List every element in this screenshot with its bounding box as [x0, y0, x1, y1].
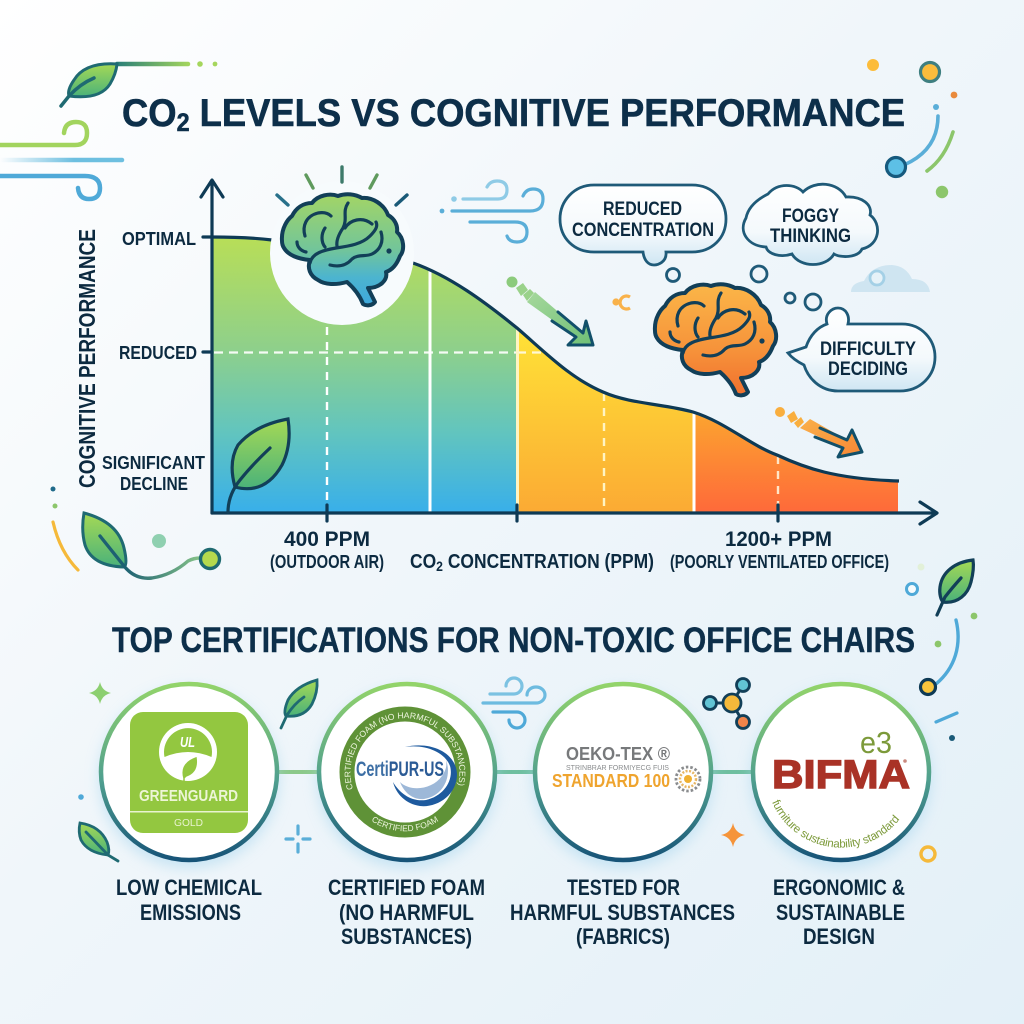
panel: BIFMA badge: [750, 682, 932, 862]
icon: stressed orange brain: [655, 284, 776, 395]
logo: CertiPUR-US seal: CERTIFIED FOAM (NO HARMFUL SUBSTANCES): [344, 712, 466, 790]
logo: BIFMA e3: furniture sustainability standard: [772, 800, 900, 848]
decoration: bottom-left leaf and node: [50, 486, 220, 578]
caption: tested for harmful substances: HARMFUL SUBSTANCES: [510, 900, 735, 925]
logo: CertiPUR-US seal: [340, 706, 470, 838]
logo: BIFMA e3: [772, 725, 910, 848]
logo: GREENGUARD Gold: [130, 712, 248, 833]
y axis title: COGNITIVE PERFORMANCE: [74, 229, 100, 488]
caption: ergonomic and sustainable design: ERGONOMIC &: [773, 875, 905, 900]
caption: certified foam: [328, 875, 485, 949]
chart area: orange zone: [693, 412, 898, 513]
x axis labels: 1200+ PPM: [725, 528, 832, 551]
thought cloud: foggy thinking: THINKING: [770, 226, 851, 247]
speech bubble: difficulty deciding: DECIDING: [828, 359, 908, 380]
title: 2: [177, 109, 190, 137]
caption: ergonomic and sustainable design: SUSTAINABLE: [776, 900, 905, 925]
decoration: top-right dots and arcs: [867, 59, 957, 198]
y axis labels: REDUCED: [119, 342, 197, 363]
arrow: orange trend: [775, 407, 862, 457]
line chart: CO2 vs performance: [201, 180, 937, 524]
y axis labels: SIGNIFICANT: [102, 452, 206, 473]
logo: BIFMA e3: e3: [860, 725, 892, 760]
logo: OEKO-TEX Standard 100: STRINBRAR FORMIYECG FUIS: [566, 765, 669, 772]
y axis labels: DECLINE: [120, 473, 188, 494]
x axis labels: (OUTDOOR AIR): [270, 552, 384, 572]
performance curve: [212, 237, 899, 481]
caption: tested for harmful substances: (FABRICS): [576, 924, 670, 949]
white spotlight behind green brain: [270, 181, 414, 325]
speech bubble: reduced concentration: [560, 185, 726, 265]
x axis labels: [270, 528, 889, 574]
icon: healthy green brain: [277, 167, 407, 305]
chart area: green to blue zone: [212, 237, 517, 513]
caption: ergonomic and sustainable design: DESIGN: [803, 924, 875, 949]
speech bubble: difficulty deciding: [788, 308, 935, 391]
speech bubble: reduced concentration: CONCENTRATION: [572, 220, 714, 241]
panel: GREENGUARD badge: [101, 684, 277, 860]
decoration: sparkles, leaves and molecule around badges: [78, 678, 935, 861]
decoration: right leaf, node and dashes: [906, 560, 977, 741]
x axis labels: (POORLY VENTILATED OFFICE): [670, 552, 889, 572]
caption: certified foam: CERTIFIED FOAM: [328, 875, 485, 900]
speech bubble: difficulty deciding: DIFFICULTY: [820, 339, 916, 360]
logo: OEKO-TEX Standard 100: OEKO-TEX ®: [566, 744, 670, 764]
caption: tested for harmful substances: TESTED FOR: [567, 875, 680, 900]
x axis labels: 2: [436, 558, 443, 574]
caption: low chemical emissions: LOW CHEMICAL: [116, 875, 262, 900]
logo: GREENGUARD Gold: GREENGUARD: [139, 788, 238, 805]
decoration: small orange swirl: [614, 296, 630, 309]
title: LEVELS VS COGNITIVE PERFORMANCE: [190, 92, 905, 135]
logo: CertiPUR-US seal: CERTIFIED FOAM: [372, 816, 438, 832]
decoration: small cloud: [851, 265, 930, 292]
logo: BIFMA e3: BIFMA: [772, 753, 910, 797]
caption: certified foam: (NO HARMFUL: [339, 900, 474, 925]
logo: GREENGUARD Gold: UL: [180, 734, 195, 751]
icon: leaf on chart: [228, 419, 289, 512]
logo: GREENGUARD Gold: GOLD: [174, 817, 203, 829]
y axis labels: [102, 228, 206, 494]
speech bubble: reduced concentration: REDUCED: [603, 199, 682, 220]
caption: low chemical emissions: EMISSIONS: [140, 900, 241, 925]
y axis labels: OPTIMAL: [122, 228, 196, 249]
caption: certified foam: SUBSTANCES): [341, 924, 472, 949]
logo: CertiPUR-US seal: CertiPUR-US: [356, 757, 444, 781]
logo: OEKO-TEX Standard 100: [552, 744, 700, 791]
logo: OEKO-TEX Standard 100: STANDARD 100: [552, 771, 670, 791]
chart area: yellow zone: [517, 328, 693, 513]
thought bubbles: [666, 266, 821, 310]
panel: OEKO-TEX badge: [535, 684, 711, 860]
thought cloud: foggy thinking: FOGGY: [782, 206, 839, 227]
decoration: top-left leaf and wind: [0, 61, 217, 199]
caption: tested for harmful substances: [510, 875, 735, 949]
caption: low chemical emissions: [116, 875, 262, 925]
arrow: green trend: [506, 276, 593, 345]
panel: badge shadows: [99, 688, 931, 868]
panel: CertiPUR-US badge: [316, 682, 498, 862]
decoration: wind above chart: [440, 181, 543, 242]
caption: ergonomic and sustainable design: [773, 875, 905, 949]
axes: [201, 180, 937, 524]
x axis labels: 400 PPM: [284, 528, 370, 551]
x axis labels: CONCENTRATION (PPM): [443, 551, 654, 573]
connector lines: [275, 770, 754, 774]
x axis labels: CO: [410, 551, 440, 573]
title: CO: [122, 92, 180, 135]
thought cloud: foggy thinking: [743, 184, 878, 264]
